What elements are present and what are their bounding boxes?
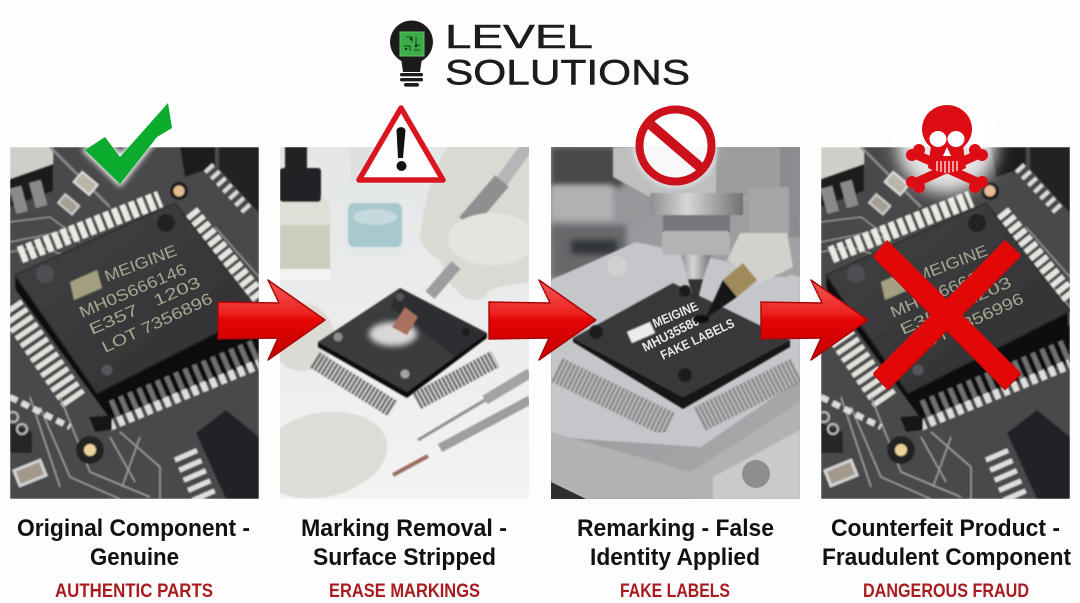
heading line 2: Genuine [90, 544, 179, 571]
scraper blade [392, 307, 418, 335]
machine background [551, 147, 800, 499]
gloved hand and scraper tool [420, 147, 529, 300]
arrow: step 1 to step 2 [218, 280, 325, 360]
icon: warning triangle [359, 108, 443, 181]
icon: red X over counterfeit chip [873, 240, 1021, 390]
fake chip markings: FAKE LABELS [658, 315, 737, 363]
PCB with counterfeit chip [819, 147, 1070, 499]
marking machine head and ink nozzle [613, 147, 800, 323]
caption: counterfeit product [822, 515, 1071, 602]
tag: DANGEROUS FRAUD [863, 581, 1029, 602]
icon: green check mark [85, 103, 172, 184]
chip markings: LOT 7356996 [911, 290, 1027, 357]
icon: light bulb with green circuit chip [390, 20, 433, 87]
heading: Marking Removal - [301, 515, 507, 542]
heading: Counterfeit Product - [831, 515, 1060, 542]
icon: prohibition sign [634, 104, 718, 188]
fake chip markings: MHU35586 [640, 313, 702, 355]
panel: original component photo [8, 147, 259, 499]
heading line 2: Fraudulent Component [822, 544, 1071, 571]
left finger behind arrow [280, 303, 334, 372]
caption: original component [17, 515, 250, 602]
chip markings: LOT 7356896 [100, 290, 216, 357]
gloved finger foreground [280, 412, 388, 498]
panel: remarking photo [551, 147, 800, 499]
chip being re-marked [557, 283, 797, 425]
chip markings: MH0S666146 [888, 261, 1001, 322]
logo: Level Solutions [390, 18, 690, 92]
heading: Original Component - [17, 515, 250, 542]
chip markings: MEIGINE [102, 243, 179, 286]
chip markings: MEIGINE [913, 243, 990, 286]
spare tools [393, 373, 530, 475]
panel: marking removal photo [280, 147, 529, 499]
solvent bottles [280, 147, 403, 280]
caption: marking removal [301, 515, 507, 602]
chip markings [890, 245, 1023, 346]
lab bench background [280, 147, 529, 499]
tag: FAKE LABELS [620, 581, 730, 602]
arrow: step 2 to step 3 [489, 280, 596, 360]
fake chip markings [642, 302, 734, 360]
heading: Remarking - False [577, 515, 774, 542]
logo wordmark: LEVEL: LEVEL [445, 18, 593, 55]
chip markings: MH0S666146 [77, 261, 190, 322]
PCB with genuine chip [8, 147, 259, 499]
fake chip markings: MEIGINE [650, 298, 701, 331]
tag: ERASE MARKINGS [329, 581, 480, 602]
stripped chip [315, 288, 495, 409]
chip markings [77, 243, 216, 357]
heading line 2: Surface Stripped [313, 544, 496, 571]
caption: remarking [577, 515, 774, 602]
panel: counterfeit product photo [819, 147, 1070, 499]
logo wordmark: SOLUTIONS: SOLUTIONS [445, 54, 690, 92]
icon: skull and crossbones [897, 97, 997, 193]
arrow: step 3 to step 4 [761, 280, 868, 360]
tag: AUTHENTIC PARTS [55, 581, 213, 602]
chip markings: E357 1203 [87, 274, 203, 339]
steel plate [551, 242, 800, 447]
heading line 2: Identity Applied [590, 544, 760, 571]
chip markings: E357 1203 [898, 274, 1014, 339]
